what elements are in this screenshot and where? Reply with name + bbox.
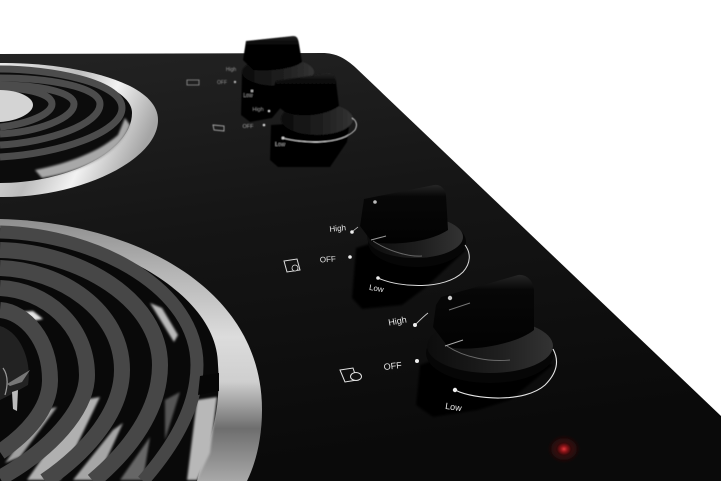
knob 3 labels: [284, 223, 385, 294]
knob 3 labels: Low: [368, 283, 385, 294]
knob 1 handle: [243, 36, 302, 71]
knob 4 handle: [433, 275, 534, 349]
knob 3 handle: [360, 185, 448, 244]
knob 3 shadow: [352, 228, 466, 309]
knob 1 collar: [242, 58, 314, 86]
rear burner bowl reflection: [35, 118, 130, 178]
knob 3 highlight: [373, 241, 422, 256]
knob 4 shadow: [416, 340, 553, 417]
knob 1: rear left: [187, 36, 314, 122]
knob 2 arc: [283, 118, 356, 142]
rear burner: [0, 63, 158, 197]
front burner hub: [0, 326, 30, 411]
rear burner centre plate: [0, 90, 33, 122]
front burner support arm: [198, 373, 219, 395]
rear burner coils: [0, 69, 122, 157]
red indicator light: [551, 438, 577, 460]
knob 3 labels: OFF: [320, 254, 336, 265]
knob 1 labels: Low: [243, 93, 253, 99]
knob 2 handle: [272, 73, 339, 115]
knob 4 labels: [340, 313, 463, 413]
knob 4 arc: [455, 349, 557, 398]
knob 2 shadow: [270, 120, 350, 167]
knob 3: front left: [284, 185, 469, 309]
knob 1 shadow: [241, 70, 300, 122]
front burner: [0, 219, 262, 481]
knob 3 labels: High: [329, 223, 346, 234]
knob 2: rear right: [213, 73, 356, 167]
knob 3 collar: [368, 217, 466, 267]
knob 4 highlight: [447, 346, 510, 360]
knob 2 labels: OFF: [242, 124, 254, 130]
front burner chrome ring: [0, 219, 262, 481]
knob 1 labels: [187, 67, 253, 99]
knob 4 labels: OFF: [383, 360, 403, 372]
front burner bowl: [0, 228, 219, 481]
knob 4 labels: High: [387, 315, 407, 328]
rear burner chrome ring: [0, 63, 158, 197]
knob 2 labels: [213, 107, 285, 148]
knob 3 arc: [378, 245, 469, 286]
knob 1 labels: OFF: [217, 80, 227, 86]
knob 4 collar: [426, 323, 554, 383]
rear burner bowl: [0, 66, 132, 183]
knob 2 labels: High: [252, 107, 264, 113]
knob 1 labels: High: [226, 67, 236, 73]
knob 2 collar: [281, 103, 353, 135]
front burner coils: [0, 232, 197, 481]
knob 4 labels: Low: [445, 401, 463, 413]
front burner bowl reflections: [5, 303, 217, 480]
knob 4: front right: [340, 275, 557, 417]
knob 2 labels: Low: [275, 142, 285, 148]
